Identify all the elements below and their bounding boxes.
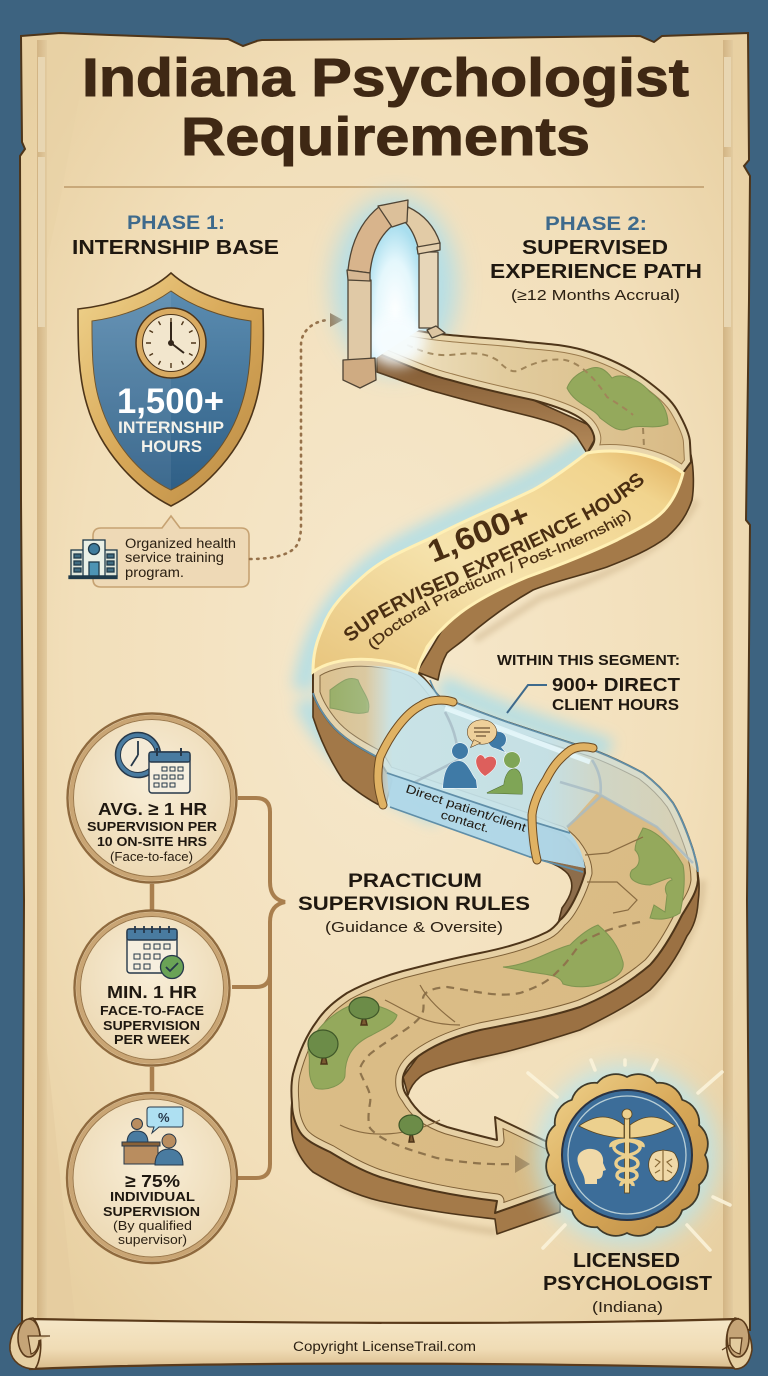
icon: supervisor and supervisee (122, 1107, 183, 1165)
panel: rule 2 weekly minimum: SUPERVISION (103, 1018, 200, 1033)
title: Indiana Psychologist (82, 48, 689, 108)
heading: practicum supervision rules: SUPERVISION RULES (298, 894, 530, 915)
panel: rule 3 individual supervision: INDIVIDUAL (110, 1189, 195, 1204)
callout: organized health service training program (69, 516, 249, 587)
title: Requirements (181, 107, 590, 167)
heading: phase 2: (≥12 Months Accrual) (511, 287, 680, 304)
portal glow (333, 197, 457, 373)
panel: rule 2 weekly minimum (74, 910, 230, 1066)
icon: clock (136, 308, 206, 378)
icon: clock and calendar (116, 732, 190, 793)
road: glass tube segment (313, 666, 698, 872)
gold band left (378, 700, 453, 805)
road: dashed trail lines (340, 345, 644, 1173)
icon: licensed psychologist badge (546, 1074, 708, 1236)
panel: rule 2 weekly minimum: PER WEEK (114, 1032, 191, 1047)
label: licensed psychologist: PSYCHOLOGIST (543, 1273, 712, 1295)
label: supervised experience hours: SUPERVISED EXPERIENCE HOURS (344, 473, 644, 641)
road: green terrain patches (308, 367, 684, 1089)
panel: rule 1 average supervision: SUPERVISION PER (87, 819, 218, 834)
title (82, 48, 689, 167)
road: blue glow around gold segment (303, 445, 610, 815)
panel: rule 1 average supervision: AVG. ≥ 1 HR (98, 799, 207, 819)
label: direct patient/client contact: Direct patient/client (404, 782, 529, 835)
icon: supervisor and supervisee: % (158, 1110, 170, 1125)
callout: 900+ direct client hours (497, 653, 680, 714)
icon: trees (308, 997, 423, 1142)
callout: 900+ direct client hours: CLIENT HOURS (552, 697, 679, 714)
panel: rule 3 individual supervision: supervisor) (118, 1233, 187, 1247)
road: soft cast shadows (296, 500, 702, 1232)
callout: 900+ direct client hours: WITHIN THIS SEGMENT: (497, 653, 680, 669)
heading: phase 2: PHASE 2: (545, 214, 647, 235)
panel: rule 3 individual supervision: ≥ 75% (125, 1171, 180, 1191)
label: direct patient/client contact (404, 782, 529, 835)
icon: calendar with check (127, 926, 184, 978)
panel: rule 1 average supervision: (Face-to-face) (110, 850, 193, 864)
portal light fill (366, 225, 426, 366)
label: direct patient/client contact: contact. (439, 807, 491, 835)
panel: rule 3 individual supervision: (By qualified (113, 1219, 192, 1233)
badge glow and rays (528, 1060, 730, 1250)
arrow: dotted connector to portal (250, 313, 343, 559)
heading: phase 2: SUPERVISED (522, 237, 668, 259)
icon: shield 1,500+ internship hours (78, 273, 263, 506)
label: licensed psychologist (543, 1250, 712, 1316)
heading: phase 1: PHASE 1: (127, 213, 225, 234)
road: upper segment from portal (377, 322, 691, 473)
callout: 900+ direct client hours: 900+ DIRECT (552, 675, 680, 695)
callout: organized health service training program: program. (125, 565, 184, 580)
panel: rule 3 individual supervision (67, 1093, 237, 1263)
callout: organized health service training program: service training (125, 550, 224, 565)
icon: hospital (69, 540, 117, 578)
scroll roll footer (10, 1318, 752, 1369)
label: licensed psychologist: (Indiana) (592, 1299, 663, 1316)
heading: phase 2: EXPERIENCE PATH (490, 261, 702, 283)
gold band right (532, 747, 593, 860)
road: side walls (291, 353, 699, 1234)
connector: circles (150, 884, 154, 1091)
icon: client conversation (443, 720, 522, 794)
icon: stone arch (343, 200, 445, 388)
panel: rule 2 weekly minimum: FACE-TO-FACE (100, 1003, 204, 1018)
icon: shield 1,500+ internship hours: 1,500+ (117, 382, 224, 421)
heading: phase 1: INTERNSHIP BASE (72, 237, 279, 259)
heading: phase 1 (72, 213, 279, 259)
callout: organized health service training program: Organized health (125, 536, 236, 551)
brace connector (232, 798, 285, 1178)
heading: practicum supervision rules (298, 871, 530, 936)
icon: shield 1,500+ internship hours: HOURS (141, 438, 202, 456)
icon: shield 1,500+ internship hours: INTERNSHIP (118, 419, 224, 437)
heading: practicum supervision rules: (Guidance & Oversite) (325, 919, 503, 936)
panel: rule 1 average supervision (68, 714, 236, 882)
copyright: Copyright LicenseTrail.com (293, 1339, 476, 1354)
road: lower segments with arrow (291, 659, 698, 1213)
heading: phase 2 (490, 214, 702, 304)
label: doctoral practicum / post-internship: (Doctoral Practicum / Post-Internship) (369, 510, 631, 650)
label: licensed psychologist: LICENSED (573, 1250, 680, 1272)
panel: rule 1 average supervision: 10 ON-SITE HRS (97, 834, 207, 849)
panel: rule 3 individual supervision: SUPERVISION (103, 1204, 200, 1219)
heading: practicum supervision rules: PRACTICUM (348, 871, 482, 892)
road: glowing gold segment 1,600+ (312, 450, 685, 675)
label: 1,600+: 1,600+ (423, 497, 535, 569)
panel: rule 2 weekly minimum: MIN. 1 HR (107, 982, 197, 1002)
